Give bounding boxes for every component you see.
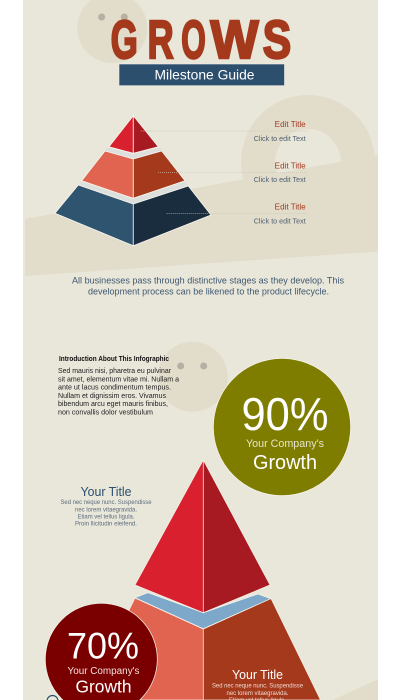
label 2: Edit Title: [275, 161, 306, 170]
label 3: Edit Title: [275, 202, 306, 212]
intro body: ante ut lacus condimentum tempus.: [58, 383, 171, 392]
intro body: sit amet, elementum vitae mi. Nullam a: [58, 374, 180, 383]
large pyramid: [85, 460, 320, 700]
label 1: [254, 120, 307, 143]
tier 2 orange: [82, 151, 185, 198]
right text block on pyramid: nec lorem vitaegravida.: [226, 690, 289, 697]
tier 3 blue: [55, 185, 211, 246]
label 2: Click to edit Text: [254, 175, 307, 184]
intro body: [58, 366, 180, 416]
left text block: your title: Sed nec neque nunc. Suspendisse: [60, 499, 152, 506]
large tier 1: red: [135, 460, 203, 613]
intro body: non convallis dolor vestibulum: [58, 407, 153, 416]
callout: 70% growth: Growth: [76, 677, 132, 697]
label 3: Click to edit Text: [254, 216, 307, 225]
decorative circle with dots: top: [77, 0, 147, 63]
intro body: Nullam et dignissim eros. Vivamus: [58, 391, 166, 400]
title: W: [210, 10, 259, 70]
lifecycle paragraph: development process can be likened to the product lifecycle.: [88, 286, 329, 298]
label 1: Edit Title: [275, 120, 306, 129]
background: decorative ring and band: [25, 95, 378, 700]
large blue band: [135, 593, 271, 629]
separator band lower: [78, 182, 188, 204]
title: [111, 10, 291, 70]
large tier 2: orange: [85, 598, 203, 700]
callout: 70% growth: Your Company's: [68, 666, 140, 677]
callout: 90% growth: [213, 358, 351, 496]
title: G: [111, 10, 138, 70]
callout: 70% growth: [45, 603, 157, 700]
small pyramid chart: [55, 116, 211, 246]
label 1: Click to edit Text: [254, 134, 307, 143]
tier 1 red: [109, 116, 158, 153]
label 3: [254, 202, 307, 225]
label 2: [254, 161, 307, 184]
decorative circle with dots: middle: [158, 342, 228, 412]
lifecycle paragraph: All businesses pass through distinctive stages as they develop. This: [72, 276, 344, 286]
subtitle banner: [119, 64, 284, 86]
separator band upper: [105, 147, 162, 159]
left text block: your title: Your Title: [80, 485, 132, 499]
subtitle banner: Milestone Guide: [154, 68, 254, 82]
right text block on pyramid: Your Title: [232, 668, 283, 682]
title: R: [148, 10, 174, 70]
left text block: your title: nec lorem vitaegravida.: [75, 506, 137, 513]
icon: small ring at bottom: [47, 696, 58, 700]
intro body: bibendum arcu eget mauris finibus,: [58, 399, 168, 408]
callout: 90% growth: 90%: [242, 388, 328, 440]
right text block on pyramid: Sed nec neque nunc. Suspendisse: [212, 682, 304, 690]
callout: 70% growth: 70%: [67, 626, 139, 666]
intro heading: Introduction About This Infographic: [59, 354, 169, 363]
title: S: [263, 10, 291, 70]
title: O: [181, 10, 206, 70]
intro body: Sed mauris nisi, pharetra eu pulvinar: [58, 366, 171, 375]
left text block: your title: Proin llicitudin eleifend.: [75, 520, 137, 528]
lifecycle paragraph: [72, 276, 344, 298]
left text block: your title: [60, 485, 152, 528]
callout: 90% growth: Your Company's: [246, 438, 324, 450]
left text block: your title: Etiam vel tellus ligula.: [78, 513, 135, 520]
leader lines: [141, 131, 308, 213]
right text block on pyramid: [212, 668, 304, 700]
callout: 90% growth: Growth: [253, 452, 317, 474]
